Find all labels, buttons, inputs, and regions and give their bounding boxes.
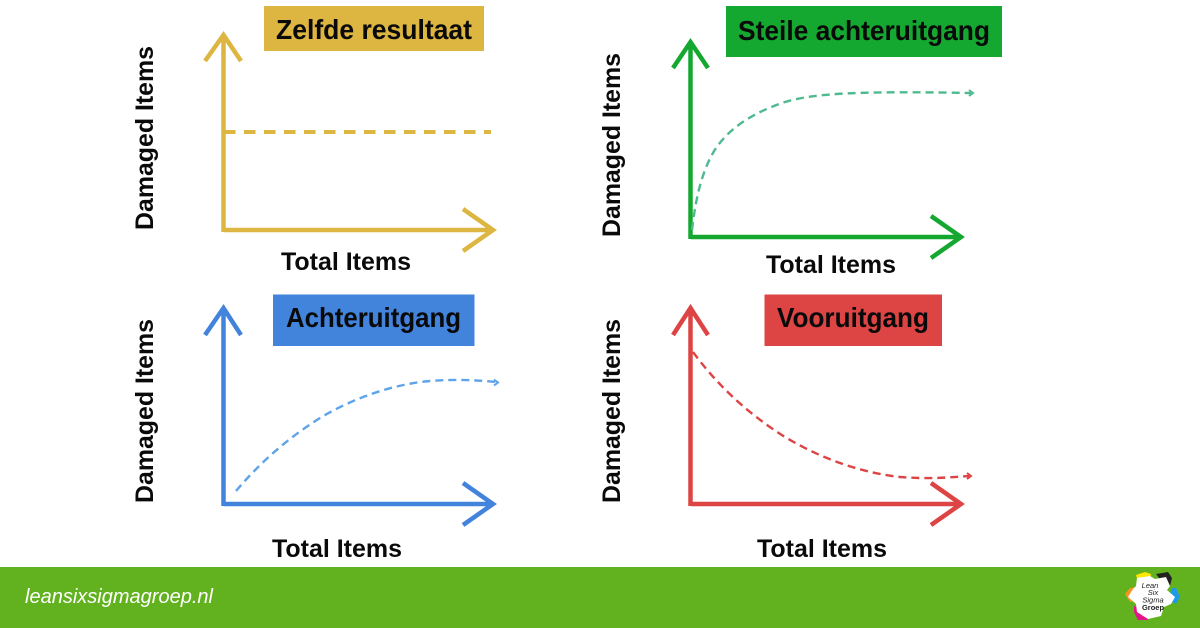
logo text: Sigma — [1142, 596, 1164, 604]
y axis label: Damaged Items — [598, 319, 626, 503]
gradual dashed curve — [236, 380, 498, 491]
x axis label: Total Items — [766, 251, 896, 279]
steep dashed curve — [692, 90, 973, 230]
panel: Vooruitgang — [598, 294, 971, 563]
logo — [1125, 572, 1180, 620]
heading: Achteruitgang — [273, 294, 474, 346]
y axis arrow — [205, 308, 241, 506]
y axis arrow — [673, 42, 708, 239]
website text: leansixsigmagroep.nl — [25, 586, 214, 608]
panel: Zelfde resultaat — [131, 6, 493, 276]
x axis arrow — [691, 216, 961, 258]
x axis arrow — [224, 483, 493, 525]
x axis label: Total Items — [757, 535, 887, 563]
panel: Achteruitgang — [131, 294, 498, 563]
falling dashed curve — [693, 352, 971, 479]
logo text — [1142, 581, 1164, 612]
y axis label: Damaged Items — [131, 46, 159, 230]
x axis label: Total Items — [272, 535, 402, 563]
panel: Steile achteruitgang — [598, 6, 1002, 279]
heading: Zelfde resultaat: Zelfde resultaat — [276, 14, 472, 45]
logo text: Groep — [1142, 603, 1164, 612]
y axis arrow — [205, 35, 241, 232]
y axis arrow — [673, 308, 708, 506]
logo colour accents — [1125, 572, 1180, 620]
x axis label: Total Items — [281, 248, 411, 276]
heading: Steile achteruitgang — [726, 6, 1002, 57]
heading: Steile achteruitgang: Steile achteruitgang — [738, 15, 990, 46]
heading: Zelfde resultaat — [264, 6, 484, 51]
logo text: Lean — [1142, 581, 1158, 590]
logo white flower — [1128, 576, 1175, 619]
y axis label: Damaged Items — [131, 319, 159, 503]
heading: Vooruitgang — [764, 294, 942, 346]
x axis arrow — [224, 209, 493, 251]
y axis label: Damaged Items — [598, 53, 626, 237]
flat dashed trend line — [224, 130, 491, 134]
x axis arrow — [691, 483, 961, 525]
heading: Achteruitgang: Achteruitgang — [286, 302, 461, 333]
logo text: Six — [1148, 588, 1158, 597]
heading: Vooruitgang: Vooruitgang — [777, 302, 929, 333]
footer band — [0, 567, 1200, 628]
